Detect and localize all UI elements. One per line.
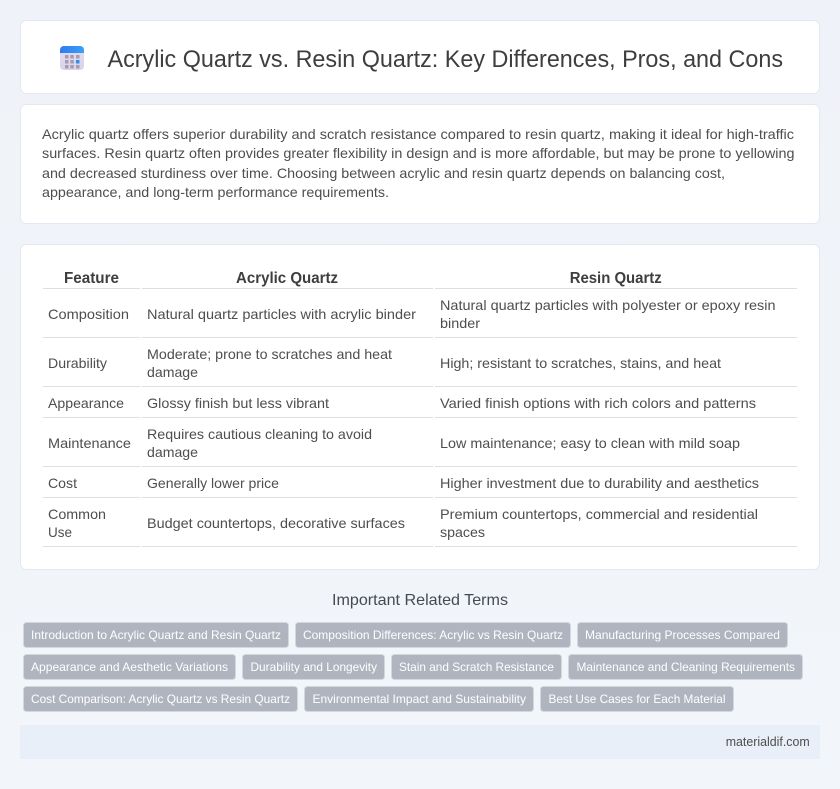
intro text: appearance, and long-term performance requirements. bbox=[42, 184, 389, 200]
tag: Manufacturing Processes Compared bbox=[585, 628, 780, 642]
intro text: and decreased sturdiness over time. Choosing between acrylic and resin quartz depends on balancing cost, bbox=[42, 165, 725, 181]
row: durability: damage bbox=[147, 364, 198, 380]
tag bbox=[392, 654, 562, 680]
row: maintenance: Requires cautious cleaning to avoid bbox=[147, 426, 372, 442]
row: composition: binder bbox=[440, 315, 480, 331]
footer bbox=[20, 725, 820, 759]
row: appearance: Glossy finish but less vibrant bbox=[147, 395, 329, 411]
panel: comparison table bbox=[20, 244, 820, 570]
tag: Environmental Impact and Sustainability bbox=[312, 692, 526, 706]
table header row: Resin Quartz bbox=[570, 270, 662, 287]
tag: Cost Comparison: Acrylic Quartz vs Resin Quartz bbox=[31, 692, 290, 706]
table header row: Feature bbox=[64, 270, 119, 287]
row: composition: Composition bbox=[48, 306, 129, 322]
intro text: Acrylic quartz offers superior durability and scratch resistance compared to resin quartz, making it ideal for high-traffic bbox=[42, 126, 794, 142]
row: common use bbox=[43, 506, 797, 547]
tag: Stain and Scratch Resistance bbox=[399, 660, 554, 674]
tag: Introduction to Acrylic Quartz and Resin Quartz bbox=[31, 628, 281, 642]
row: durability: Durability bbox=[48, 355, 107, 371]
row: composition: Natural quartz particles with acrylic binder bbox=[147, 306, 416, 322]
row: cost: Generally lower price bbox=[147, 475, 279, 491]
tag bbox=[578, 622, 788, 648]
tag bbox=[568, 654, 802, 680]
row: common use: Budget countertops, decorative surfaces bbox=[147, 515, 405, 531]
panel: related term tags bbox=[24, 622, 802, 712]
panel: title header bbox=[20, 20, 820, 94]
tag: Composition Differences: Acrylic vs Resin Quartz bbox=[303, 628, 563, 642]
row: maintenance bbox=[43, 426, 797, 467]
row: common use: Use bbox=[48, 524, 72, 540]
icon: calendar bbox=[60, 46, 84, 70]
row: common use: spaces bbox=[440, 524, 485, 540]
tag bbox=[242, 654, 384, 680]
row: appearance: Varied finish options with rich colors and patterns bbox=[440, 395, 756, 411]
row: durability: High; resistant to scratches, stains, and heat bbox=[440, 355, 721, 371]
row: cost: Higher investment due to durability and aesthetics bbox=[440, 475, 759, 491]
row: cost bbox=[43, 475, 797, 498]
row: maintenance: damage bbox=[147, 444, 198, 460]
tag bbox=[304, 686, 534, 712]
row: appearance bbox=[43, 395, 797, 418]
row: common use: Common bbox=[48, 506, 106, 522]
row: maintenance: Maintenance bbox=[48, 435, 131, 451]
tag bbox=[540, 686, 734, 712]
tag bbox=[296, 622, 570, 648]
tag bbox=[24, 622, 288, 648]
row: common use: Premium countertops, commercial and residential bbox=[440, 506, 758, 522]
row: composition bbox=[43, 297, 797, 338]
panel: introduction bbox=[20, 104, 820, 224]
footer: materialdif.com bbox=[726, 735, 810, 749]
tag: Appearance and Aesthetic Variations bbox=[31, 660, 228, 674]
table header row bbox=[43, 270, 797, 289]
table header row: Acrylic Quartz bbox=[236, 270, 338, 287]
tag: Best Use Cases for Each Material bbox=[548, 692, 726, 706]
tag: Durability and Longevity bbox=[250, 660, 377, 674]
row: durability: Moderate; prone to scratches and heat bbox=[147, 346, 392, 362]
intro text bbox=[42, 126, 795, 200]
title: Acrylic Quartz vs. Resin Quartz: Key Differences, Pros, and Cons bbox=[108, 46, 783, 73]
tag bbox=[24, 654, 236, 680]
row: maintenance: Low maintenance; easy to clean with mild soap bbox=[440, 435, 740, 451]
row: durability bbox=[43, 346, 797, 387]
tag: Maintenance and Cleaning Requirements bbox=[576, 660, 795, 674]
row: cost: Cost bbox=[48, 475, 77, 491]
heading: related terms: Important Related Terms bbox=[332, 592, 508, 609]
intro text: surfaces. Resin quartz often provides greater flexibility in design and is more affordable, but may be prone to yellowing bbox=[42, 145, 795, 161]
row: composition: Natural quartz particles with polyester or epoxy resin bbox=[440, 297, 776, 313]
row: appearance: Appearance bbox=[48, 395, 124, 411]
tag bbox=[24, 686, 298, 712]
